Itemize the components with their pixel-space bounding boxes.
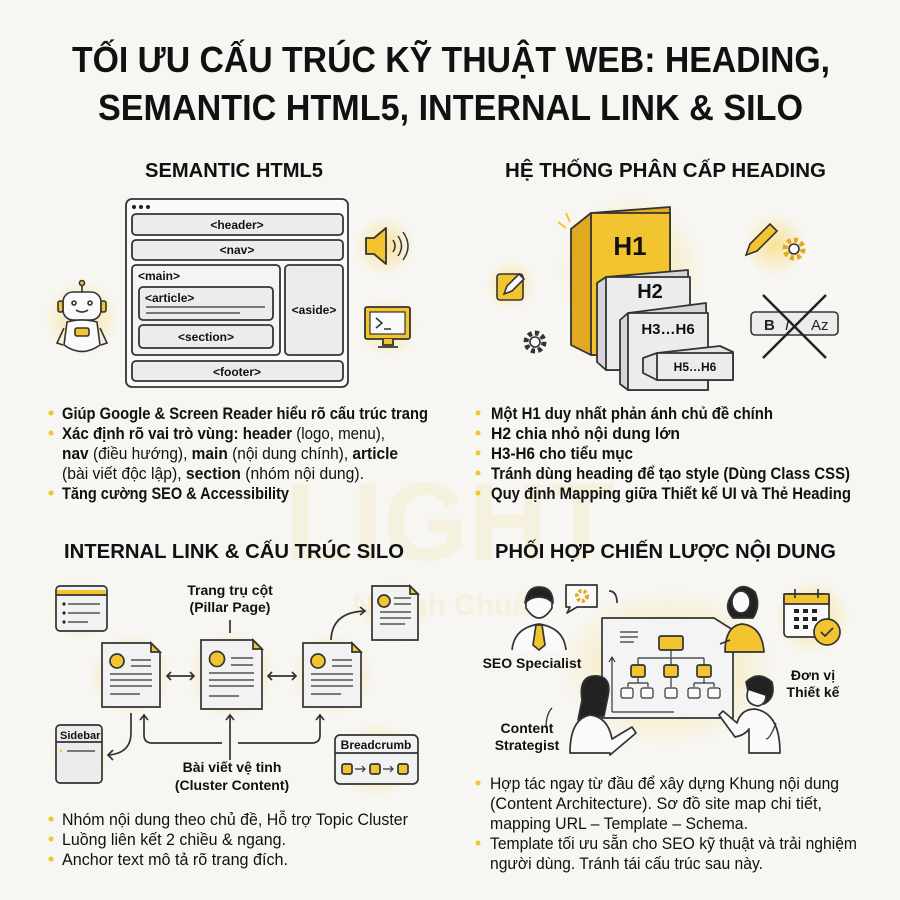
icon: gear left <box>526 333 544 351</box>
breadcrumb <box>335 735 418 784</box>
diagram: browser semantic layout: <footer> <box>213 365 261 379</box>
bullets: content strategy: Template tối ưu sẵn cho SEO kỹ thuật và trải nghiệm <box>490 834 857 853</box>
bullets: internal link: Nhóm nội dung theo chủ đề, Hỗ trợ Topic Cluster <box>62 810 408 829</box>
bullets: content strategy <box>476 775 857 873</box>
heading: heading hierarchy: HỆ THỐNG PHÂN CẤP HEADING <box>505 158 826 182</box>
heading: content strategy: PHỐI HỢP CHIẾN LƯỢC NỘI DUNG <box>495 539 836 563</box>
SEO specialist <box>526 591 552 618</box>
icon: pencil right <box>743 213 807 277</box>
bullets: semantic html5: Tăng cường SEO & Accessibility <box>62 485 290 503</box>
bullets: content strategy: người dùng. Tránh tái cấu trúc sau này. <box>490 855 763 873</box>
woman left <box>578 676 609 720</box>
diagram: browser semantic layout: <nav> <box>220 243 254 257</box>
diagram: browser semantic layout <box>126 199 348 387</box>
diagram: browser semantic layout: <section> <box>178 330 234 344</box>
diagram: browser semantic layout: <main> <box>138 269 180 283</box>
text: SEO Specialist <box>483 655 582 671</box>
bullets: internal link <box>48 810 408 869</box>
diagram: heading staircase: H1 <box>613 231 647 261</box>
heading: internal link: INTERNAL LINK & CẤU TRÚC SILO <box>64 539 404 563</box>
icon: edit box <box>486 260 536 310</box>
text: Thiết kế <box>787 684 840 700</box>
bullets: heading hierarchy: H2 chia nhỏ nội dung lớn <box>491 425 680 443</box>
bullets: semantic html5: (bài viết độc lập), section (nhóm nội dung). <box>62 465 364 483</box>
diagram: browser semantic layout: <aside> <box>292 303 336 317</box>
icon: crossed text style: I <box>785 317 789 334</box>
calendar <box>784 594 829 637</box>
icon: crossed text style <box>751 295 838 358</box>
bullets: content strategy: (Content Architecture). Sơ đồ site map chi tiết, <box>490 795 822 813</box>
text: Trang trụ cột <box>187 582 273 598</box>
text: Bài viết vệ tinh <box>183 759 281 775</box>
bullets: internal link: Luồng liên kết 2 chiều & ngang. <box>62 831 286 849</box>
watermark: LIGHT <box>285 461 615 584</box>
text: Đơn vị <box>791 667 835 683</box>
text: Sidebar <box>60 730 101 742</box>
diagram: heading staircase: H5…H6 <box>674 360 717 374</box>
diagram: browser semantic layout: <header> <box>210 218 264 232</box>
bullets: heading hierarchy: Một H1 duy nhất phản ánh chủ đề chính <box>491 405 773 423</box>
title: SEMANTIC HTML5, INTERNAL LINK & SILO <box>98 87 803 128</box>
diagram: team collaboration <box>512 579 851 755</box>
title: TỐI ƯU CẤU TRÚC KỸ THUẬT WEB: HEADING, <box>72 38 830 80</box>
bullets: heading hierarchy <box>476 405 851 503</box>
text: Breadcrumb <box>341 738 411 752</box>
diagram: heading staircase: H3…H6 <box>641 321 695 338</box>
bullets: semantic html5: Xác định rõ vai trò vùng: header (logo, menu), <box>62 425 385 443</box>
bullets: semantic html5: nav (điều hướng), main (nội dung chính), article <box>62 445 398 463</box>
text: (Pillar Page) <box>190 599 270 615</box>
bullets: content strategy: Hợp tác ngay từ đầu để xây dựng Khung nội dung <box>490 775 839 793</box>
bullets: heading hierarchy: H3-H6 cho tiểu mục <box>491 445 633 463</box>
docs <box>102 586 418 709</box>
bullets: internal link: Anchor text mô tả rõ trang đích. <box>62 851 288 869</box>
title <box>72 38 830 128</box>
sidebar <box>56 725 102 783</box>
watermark: Nhanh Chuẩn <box>352 589 548 622</box>
man right <box>746 676 773 704</box>
diagram: heading staircase <box>555 195 733 390</box>
heading: semantic html5: SEMANTIC HTML5 <box>145 160 323 182</box>
text: (Cluster Content) <box>175 777 289 793</box>
bullets: semantic html5 <box>48 405 428 503</box>
bullets: heading hierarchy: Tránh dùng heading để tạo style (Dùng Class CSS) <box>491 465 850 483</box>
speech gear <box>566 585 597 613</box>
icon: crossed text style: Az <box>811 317 829 334</box>
woman top right <box>728 587 758 618</box>
icon: robot <box>44 280 120 356</box>
bullets: content strategy: mapping URL – Template – Schema. <box>490 815 748 833</box>
icon: speaker <box>355 216 415 276</box>
diagram: heading staircase: H2 <box>637 281 663 303</box>
icon: terminal monitor <box>358 297 418 357</box>
icon: crossed text style: B <box>764 317 775 334</box>
diagram: silo internal links <box>49 580 427 798</box>
list icon <box>56 586 107 631</box>
board <box>602 618 733 718</box>
diagram: browser semantic layout: <article> <box>145 291 194 305</box>
text: Strategist <box>495 737 560 753</box>
bullets: semantic html5: Giúp Google & Screen Reader hiểu rõ cấu trúc trang <box>62 405 428 423</box>
text: Content <box>501 720 554 736</box>
bullets: heading hierarchy: Quy định Mapping giữa Thiết kế UI và Thẻ Heading <box>491 485 851 503</box>
arrows <box>167 672 296 680</box>
icon: gear right <box>785 240 803 258</box>
